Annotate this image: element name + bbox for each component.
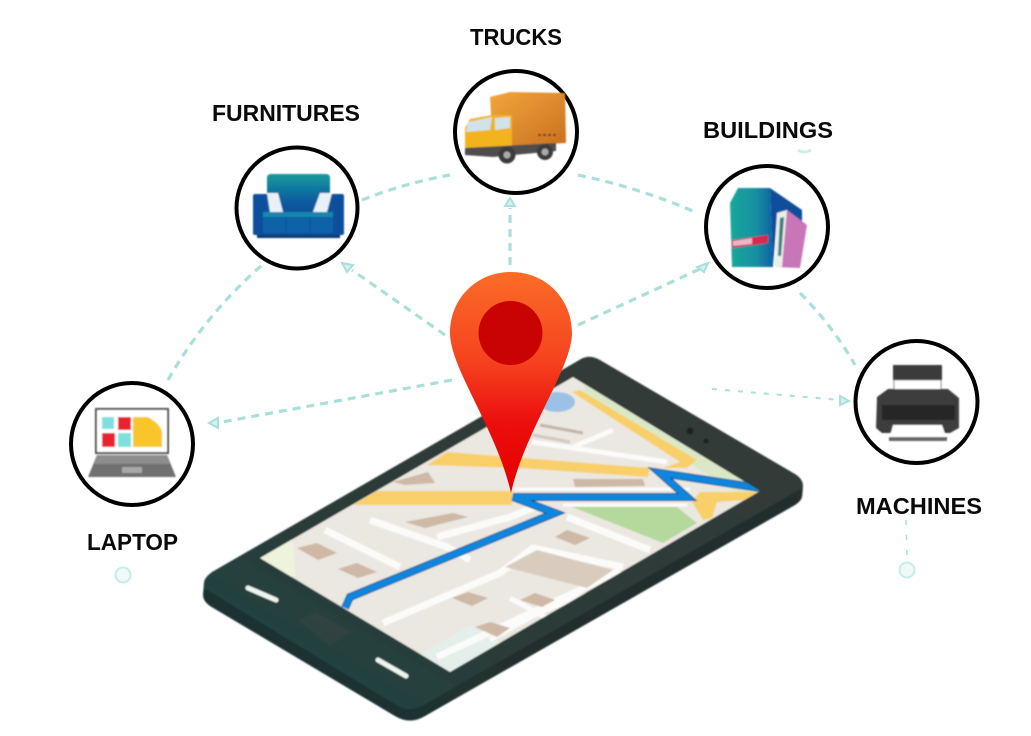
node: machines	[856, 341, 978, 463]
lake	[539, 392, 575, 412]
label: laptop: LAPTOP	[87, 529, 178, 555]
park	[572, 507, 697, 543]
label: machines: MACHINES	[856, 493, 982, 519]
label: furnitures: FURNITURES	[212, 100, 360, 126]
phone with map	[203, 357, 803, 720]
node: furnitures	[236, 148, 358, 268]
node: trucks	[455, 71, 577, 193]
blue route	[345, 473, 760, 608]
phone body	[203, 357, 803, 720]
icon: laptop	[88, 409, 176, 477]
icon: printer	[876, 365, 959, 441]
building blocks	[393, 472, 435, 485]
location pin	[450, 272, 572, 493]
yellow roads	[353, 390, 760, 520]
label: buildings: BUILDINGS	[703, 117, 833, 143]
connector network: dashed lines	[116, 150, 914, 582]
node: laptop	[71, 383, 193, 505]
label: trucks: TRUCKS	[470, 24, 562, 50]
icon: truck	[465, 92, 566, 164]
icon: building	[730, 188, 807, 268]
camera dots	[686, 428, 694, 434]
home buttons	[248, 588, 406, 676]
icon: sofa	[253, 174, 344, 238]
map screen	[260, 377, 760, 672]
node: buildings	[706, 166, 828, 288]
white roads	[325, 430, 690, 657]
